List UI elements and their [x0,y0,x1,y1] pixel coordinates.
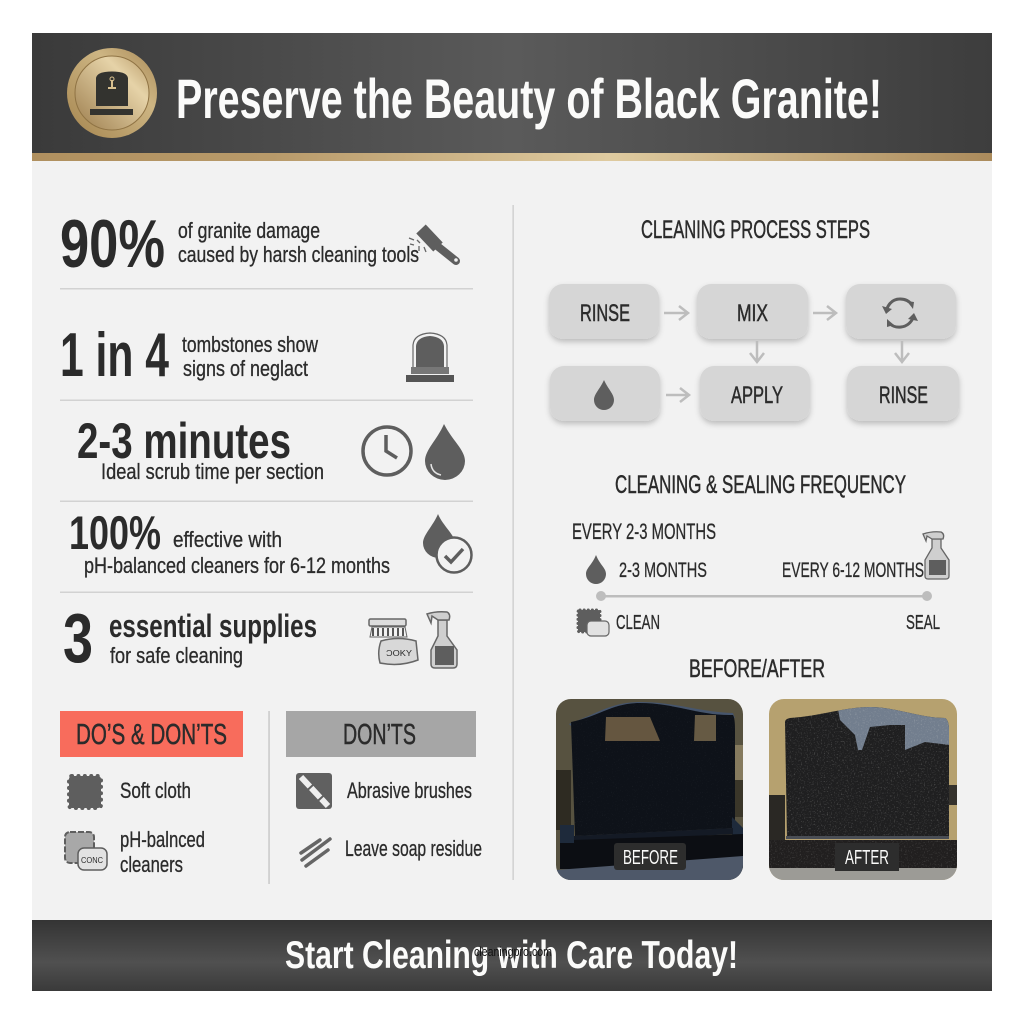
icon: cloth with cleaner: CONC [81,856,103,865]
stat: 1 in 4 [60,321,454,390]
step: apply: APPLY [731,382,783,409]
icon: spray bottle [923,532,949,579]
step: water drop [550,366,660,421]
stat: 3 essential supplies: for safe cleaning [110,643,243,668]
label: after: AFTER [845,847,889,869]
icon: gold tombstone medal [67,48,157,138]
step: final rinse [847,366,959,421]
step: mix [697,284,808,339]
step: rinse: RINSE [580,300,630,327]
watermark url: cleaningpro.com [474,944,552,959]
timeline [596,591,932,601]
do's heading: DO’S & DON’TS [76,719,227,751]
label: seal: SEAL [906,612,940,634]
label: before [614,843,686,870]
step: mix: MIX [737,300,768,327]
stat: 1 in 4: 1 in 4 [60,321,169,390]
don'ts heading [286,711,476,757]
step: final rinse: RINSE [879,382,928,409]
stat: 100%: 100% [69,506,161,559]
stat: 100%: effective with [173,527,282,552]
footer banner [32,920,992,991]
stat: 1 in 4: signs of neglact [183,356,308,381]
stat: 90%: caused by harsh cleaning tools [178,242,419,267]
header banner [32,33,992,161]
stat: 2-3 minutes: Ideal scrub time per section [101,459,324,484]
don'ts heading: DON’TS [343,719,416,751]
footer call to action: Start Cleaning with Care Today! [285,934,738,977]
stat: 100% [69,506,472,578]
arrows between steps [664,306,909,402]
frequency timeline section [572,471,949,636]
label: every 2-3 months: EVERY 2-3 MONTHS [572,519,716,544]
text: pH cleaners: cleaners [120,852,183,877]
do's panel [60,711,243,877]
icon: clock [363,427,411,475]
stat: 3 essential supplies: 3 [63,599,93,677]
text: soft cloth: Soft cloth [120,778,191,803]
stat: 2-3 minutes: 2-3 minutes [77,413,291,469]
icon: brush [409,229,458,262]
icon: brush and sponge [369,619,418,664]
stat: 90%: of granite damage [178,218,320,243]
step: apply [700,366,810,421]
stat: 90% [60,206,458,282]
heading: before/after: BEFORE/AFTER [689,655,825,683]
text: pH cleaners [120,827,205,877]
photo: after [769,699,957,880]
process steps section [549,216,959,421]
label: before: BEFORE [623,847,678,869]
icon: drop [586,555,606,584]
step: scrub cycle [846,284,956,339]
text: leave soap residue: Leave soap residue [345,836,482,861]
stat: 100%: pH-balanced cleaners for 6-12 months [84,553,390,578]
icon: tombstone [406,333,454,382]
label: every 6-12 months: EVERY 6-12 MONTHS [782,559,924,582]
icon: brush and sponge: ƆOKY [386,649,413,658]
label: after [835,843,899,871]
icon: abrasive brush crossed [296,773,332,809]
icon: drop with check [423,514,472,572]
icon: water drop [425,424,465,480]
text: abrasive brushes: Abrasive brushes [347,778,472,803]
label: clean: CLEAN [616,612,660,634]
don'ts panel [286,711,482,866]
icon: cloth and cleaner [578,610,609,636]
stat: 1 in 4: tombstones show [182,332,318,357]
icon: soap streaks [301,839,330,866]
icon: spray bottle [427,612,457,668]
stat: 3 essential supplies [63,599,457,677]
text: pH cleaners: pH-balnced [120,827,205,852]
do's heading [60,711,243,757]
photo: before [556,699,743,880]
step: rinse [549,284,659,339]
icon: cloth with cleaner [65,832,107,870]
stat: 2-3 minutes [77,413,465,484]
stat: 90%: 90% [60,206,165,282]
icon: soft cloth [69,776,101,808]
stat: 3 essential supplies: essential supplies [109,608,317,644]
heading: process steps: CLEANING PROCESS STEPS [641,216,870,244]
label: 2-3 months: 2-3 MONTHS [619,559,707,582]
